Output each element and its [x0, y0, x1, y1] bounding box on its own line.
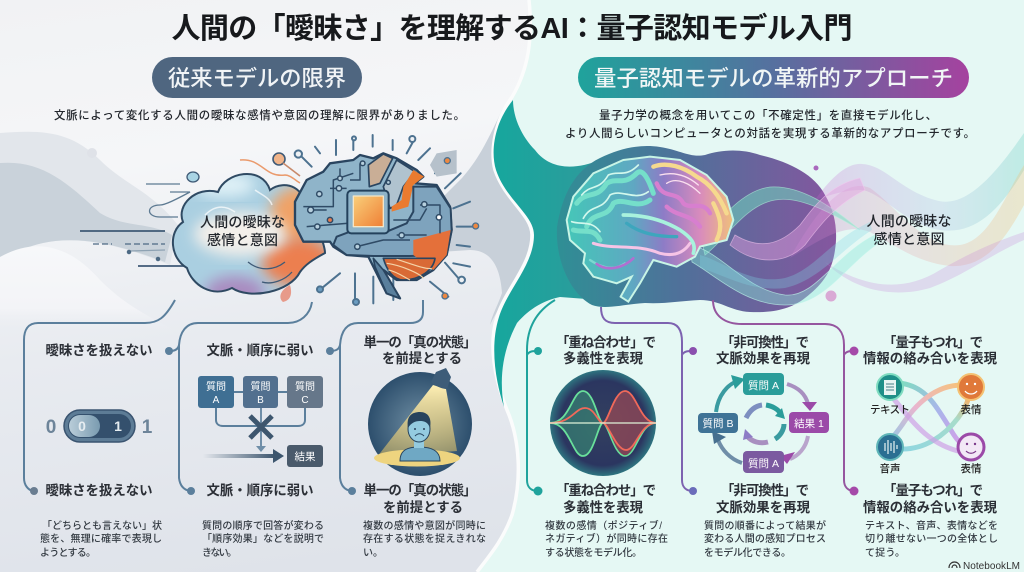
panel heading — [364, 334, 476, 366]
diagram: question order flow — [198, 376, 323, 467]
icon: binary toggle: 0 — [46, 417, 56, 438]
diagram: question order flow: A — [213, 395, 220, 406]
panel: superposition — [545, 335, 668, 559]
panel description: テキスト、音声、表情などを — [865, 519, 998, 532]
panel heading: 曖昧さを扱えない — [46, 342, 152, 358]
cloud label: 人間の曖昧な — [200, 214, 285, 230]
panel heading: 多義性を表現 — [563, 350, 644, 366]
icon: binary toggle: 1 — [114, 418, 122, 434]
heading pill: traditional model limits: 従来モデルの限界 — [168, 65, 346, 91]
background: gradient blob behind quantum brain — [557, 146, 836, 312]
background: left gray waves — [0, 97, 532, 335]
background: teal band — [494, 100, 600, 407]
icon: binary toggle: 1 — [142, 417, 153, 438]
diagram: entangled modalities — [870, 374, 984, 475]
illustration: cloud of ambiguous emotion — [172, 173, 326, 295]
panel: entanglement — [863, 335, 998, 559]
panel description — [363, 519, 486, 559]
panel subheading: 「量子もつれ」で — [883, 483, 983, 498]
panel description: 質問の順番によって結果が — [704, 519, 826, 532]
panel description: て捉う。 — [865, 546, 905, 559]
panel heading: 「非可換性」で — [721, 334, 809, 350]
cloud label — [200, 214, 285, 248]
dots near quantum ribbons — [814, 166, 836, 302]
panel description: 変わる人間の感知プロセス — [704, 532, 826, 545]
panel description: 態を、無理に確率で表現し — [40, 532, 162, 545]
panel heading: 「重ね合わせ」で — [556, 335, 656, 350]
diagram: question cycle: 結果 1 — [794, 417, 824, 430]
panel heading — [716, 334, 811, 366]
panel subheading: 曖昧さを扱えない — [46, 482, 152, 498]
icon: spotlight on person — [368, 368, 472, 476]
illustration: quantum brain — [567, 157, 733, 302]
connector lines: right column — [527, 300, 858, 496]
panel description — [40, 519, 162, 559]
diagram: question order flow: 質問 — [295, 380, 315, 393]
watermark: NotebookLM: NotebookLM — [963, 561, 1020, 572]
diagram: entangled modalities: 音声 — [880, 462, 900, 475]
panel subheading: 単一の「真の状態」 — [364, 482, 476, 498]
panel description: 切り離せない一つの全体とし — [865, 532, 998, 545]
panel: non-commutativity — [698, 334, 829, 559]
panel heading: を前提とする — [382, 350, 462, 366]
panel: assumes single true state — [363, 334, 486, 559]
panel subheading — [863, 483, 998, 515]
diagram: entangled modalities: 表情 — [960, 403, 982, 416]
panel description: 複数の感情（ポジティブ/ — [545, 519, 662, 532]
diagram: question order flow: B — [257, 395, 264, 406]
panel subheading — [364, 482, 476, 515]
label: ambiguous emotion, right: 人間の曖昧な — [866, 213, 952, 229]
panel heading: 「量子もつれ」で — [883, 335, 983, 350]
intro text: right — [565, 108, 975, 140]
panel description: い。 — [363, 548, 383, 559]
panel heading: 情報の絡み合いを表現 — [863, 350, 998, 366]
background: right panel — [477, 0, 1024, 572]
panel description: ようとする。 — [40, 547, 96, 559]
illustration: circuit brain — [295, 135, 479, 305]
label: ambiguous emotion, right: 感情と意図 — [874, 231, 944, 247]
panel description: 存在する状態を捉えきれな — [363, 532, 486, 545]
panel description: 質問の順序で回答が変わる — [202, 519, 324, 532]
panel description — [545, 519, 668, 559]
panel subheading: 情報の絡み合いを表現 — [863, 499, 998, 515]
panel subheading: を前提とする — [383, 499, 463, 515]
panel description: ネガティブ）が同時に存在 — [545, 532, 668, 545]
panel subheading: 多義性を表現 — [563, 499, 644, 515]
diagram: question order flow: 結果 — [294, 450, 316, 463]
panel description — [202, 519, 324, 559]
heading pill: traditional model limits — [152, 57, 362, 98]
icon: binary toggle: 0 — [78, 418, 86, 434]
diagram: question cycle: 質問 A — [748, 379, 779, 392]
intro text: right: 量子力学の概念を用いてこの「不確定性」を直接モデル化し、 — [599, 108, 937, 122]
diagram: entangled modalities: テキスト — [870, 404, 910, 416]
diagram: question cycle — [698, 373, 829, 473]
connector lines: left column — [24, 300, 423, 495]
panel description — [704, 519, 826, 559]
diagram: question order flow: C — [301, 395, 309, 406]
panel heading — [556, 335, 656, 366]
panel subheading — [556, 483, 656, 515]
diagram: question order flow: 質問 — [206, 380, 226, 393]
illustration: speed lines left of cloud — [80, 148, 300, 302]
panel description: をモデル化できる。 — [704, 546, 791, 559]
diagram: question order flow: 質問 — [250, 380, 270, 393]
background: white divider — [477, 0, 532, 572]
icon: wave sphere — [550, 370, 656, 476]
panel subheading: 「非可換性」で — [721, 482, 809, 498]
panel description: する状態をモデル化。 — [545, 546, 642, 559]
panel description — [865, 519, 998, 559]
intro text: right: より人間らしいコンピュータとの対話を実現する革新的なアプローチです。 — [565, 126, 975, 140]
brain chip — [347, 191, 389, 233]
panel heading: 文脈・順序に弱い — [206, 342, 314, 358]
label: ambiguous emotion, right — [866, 213, 952, 247]
panel subheading: 「重ね合わせ」で — [556, 483, 656, 498]
panel subheading: 文脈・順序に弱い — [206, 482, 314, 498]
panel: cannot handle ambiguity — [40, 342, 162, 559]
diagram: question cycle: 質問 A — [748, 457, 779, 470]
diagram: question cycle: 質問 B — [703, 417, 733, 430]
icon: binary toggle — [46, 410, 153, 442]
panel subheading: 文脈効果を再現 — [716, 499, 811, 515]
panel: weak on context and order — [198, 342, 324, 559]
panel description: きない。 — [202, 547, 237, 559]
panel heading — [863, 335, 998, 366]
panel subheading — [716, 482, 811, 515]
intro text: left: 文脈によって変化する人間の曖昧な感情や意図の理解に限界がありました。 — [54, 108, 465, 122]
panel description: 「どちらとも言えない」状 — [42, 519, 162, 532]
panel heading: 単一の「真の状態」 — [364, 334, 476, 350]
cloud label: 感情と意図 — [207, 232, 278, 248]
heading pill: quantum cognition approach — [578, 57, 969, 98]
title: 人間の「曖昧さ」を理解するAI：量子認知モデル入門 — [172, 11, 852, 45]
illustration: quantum ribbons — [690, 133, 1024, 305]
heading pill: quantum cognition approach: 量子認知モデルの革新的アプローチ — [594, 65, 953, 91]
panel heading: 文脈効果を再現 — [716, 350, 811, 366]
diagram: entangled modalities: 表情 — [960, 462, 982, 475]
panel description: 「順序効果」などを説明で — [202, 532, 324, 545]
panel description: 複数の感情や意図が同時に — [363, 519, 486, 532]
